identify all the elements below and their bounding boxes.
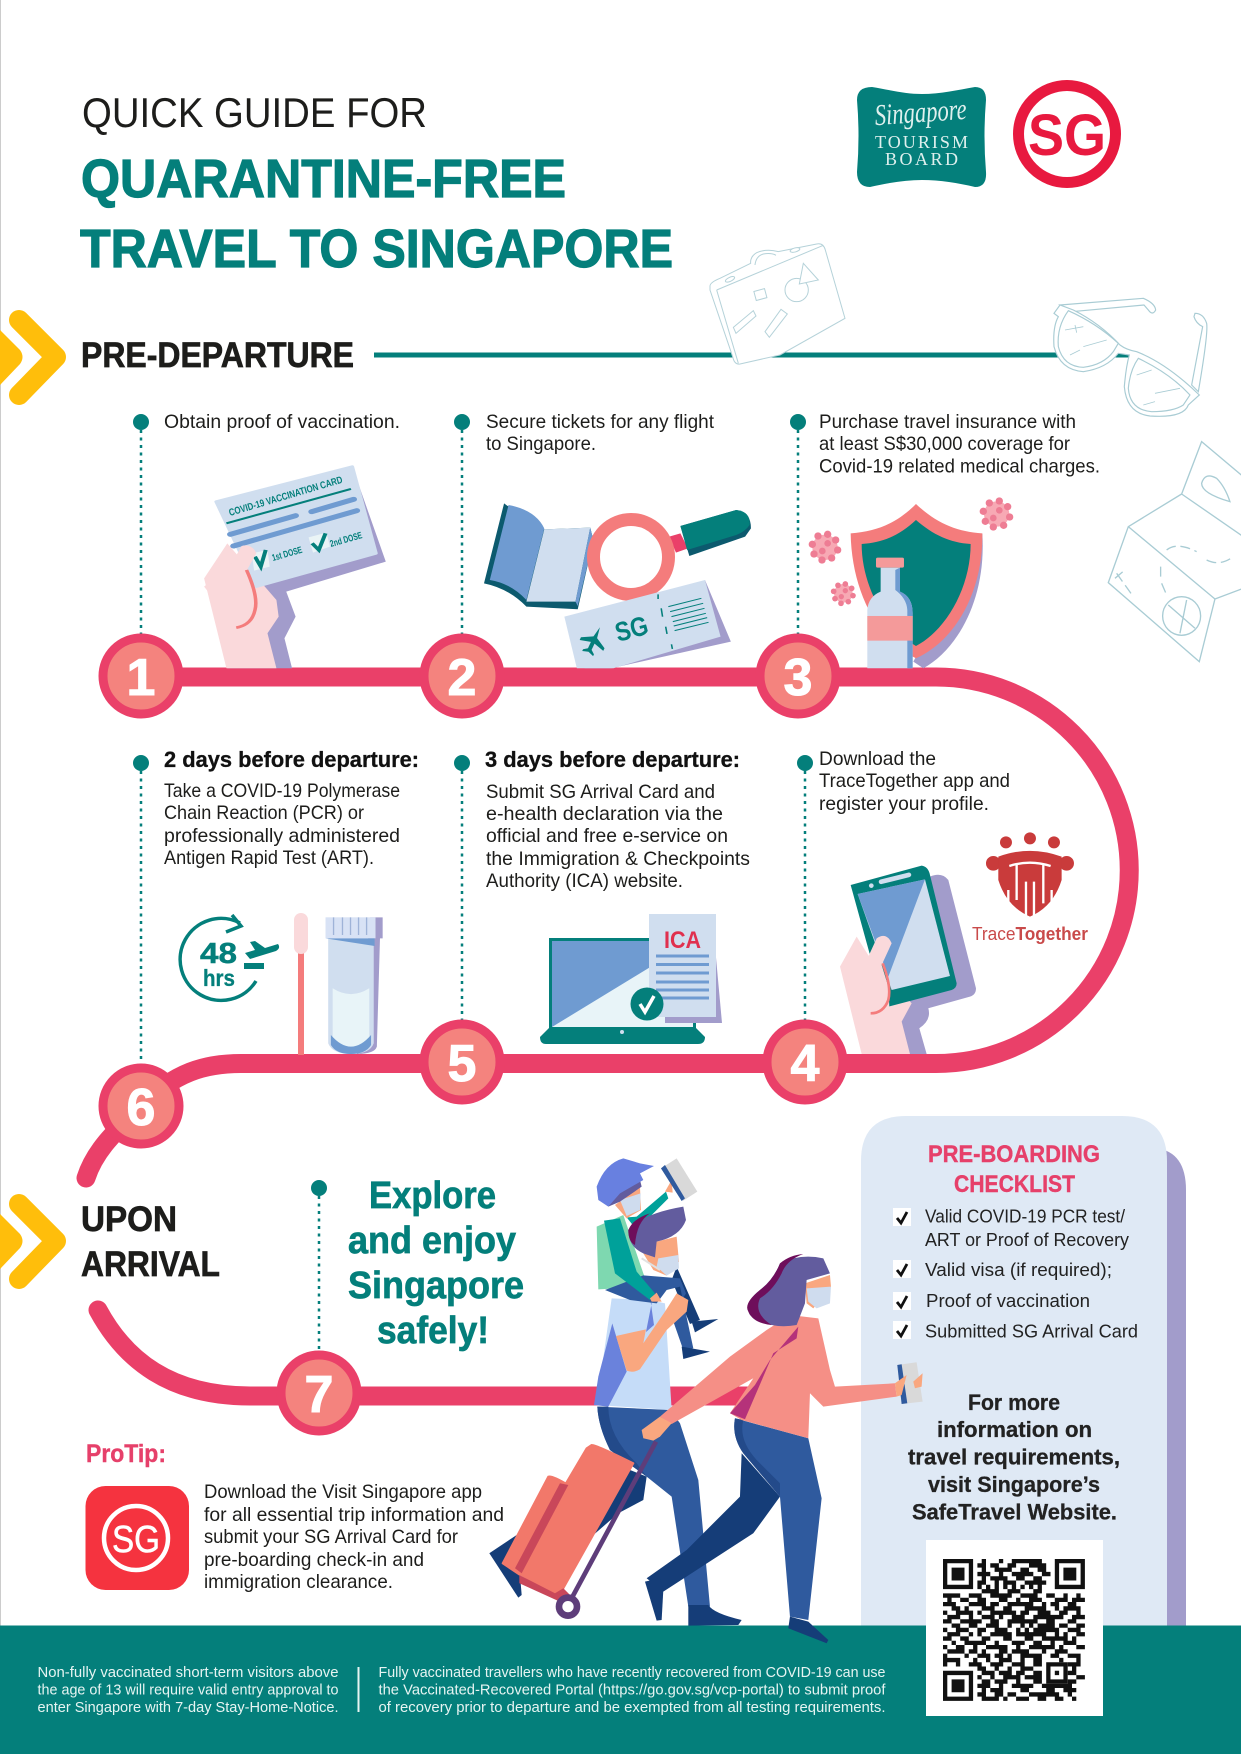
step 6 icon: 48 hours timer [180, 915, 279, 1000]
step 6 text: professionally administered [164, 825, 400, 847]
step 1 icon: vaccination card in hand: 2nd DOSE [329, 530, 364, 550]
step 5 text: the Immigration & Checkpoints [486, 848, 750, 870]
child upper body [597, 1158, 697, 1289]
step circle 7: 7 [305, 1366, 333, 1424]
step circle 2: 2 [448, 649, 476, 707]
woman [642, 1254, 923, 1643]
step 2 text: Secure tickets for any flight [486, 411, 715, 433]
panel: pre-boarding checklist: SafeTravel Website. [912, 1500, 1117, 1524]
step circle 6 [103, 1068, 179, 1144]
panel: pre-boarding checklist: travel requirements, [908, 1444, 1120, 1470]
panel: pre-boarding checklist: Valid visa (if required); [925, 1259, 1112, 1280]
panel: pre-boarding checklist: visit Singapore’s [928, 1472, 1100, 1497]
step 7 message: and enjoy [348, 1220, 516, 1262]
footer band: Fully vaccinated travellers who have recently recovered from COVID-19 can use [378, 1665, 886, 1681]
step 5 icon: laptop and ICA document [540, 914, 722, 1044]
icon: Visit Singapore app [86, 1486, 189, 1590]
protip text: Download the Visit Singapore app [204, 1481, 482, 1503]
step 5 icon: laptop and ICA document: ICA [664, 927, 701, 954]
step 2 text: to Singapore. [486, 433, 596, 455]
step 5 text: Submit SG Arrival Card and [486, 781, 715, 803]
step 5 text [454, 747, 750, 892]
logo: SG circle: SG [1028, 103, 1106, 168]
panel: pre-boarding checklist: CHECKLIST [954, 1171, 1075, 1198]
panel: pre-boarding checklist: For more [968, 1390, 1060, 1415]
step 3 icon: shield, bottle and viruses [809, 497, 1013, 668]
logo: SG circle [1018, 86, 1116, 182]
logo: TraceTogether [972, 832, 1088, 944]
step 7 message: safely! [377, 1310, 489, 1352]
chevrons: pre-departure [0, 320, 56, 395]
QR code [926, 1540, 1103, 1716]
title: QUARANTINE-FREE [81, 149, 566, 209]
logo: Singapore Tourism Board: Singapore [874, 93, 968, 132]
step 6 icon: 48 hours timer: hrs [203, 965, 235, 991]
man legs [489, 1407, 742, 1626]
heading: upon arrival: ARRIVAL [81, 1245, 220, 1284]
step circle 4: 4 [791, 1035, 820, 1093]
footer band: of recovery prior to departure and be exempted from all testing requirements. [378, 1700, 886, 1716]
step 3 text [790, 411, 1100, 478]
step circle 1: 1 [127, 649, 155, 707]
chevrons: upon arrival [0, 1204, 56, 1279]
step 6 icon: swab and test tube [294, 913, 383, 1055]
dotted connectors [141, 430, 805, 1354]
step 4 text: Download the [819, 748, 936, 770]
step 1 icon: vaccination card in hand [204, 467, 386, 668]
step 6 text [133, 747, 419, 869]
step 7 message [311, 1175, 524, 1352]
heading: pre-departure: PRE-DEPARTURE [81, 336, 354, 375]
title [80, 89, 673, 279]
step 2 text [454, 411, 715, 455]
step 4 text: TraceTogether app and [819, 770, 1010, 792]
step 6 text: 2 days before departure: [164, 747, 419, 772]
suitcase [503, 1442, 656, 1616]
step 6 text: Take a COVID-19 Polymerase [164, 780, 400, 802]
child far leg [672, 1267, 718, 1332]
logo: Singapore Tourism Board: TOURISM [875, 132, 968, 152]
panel: pre-boarding checklist: ART or Proof of Recovery [925, 1229, 1130, 1250]
pathway road upper [86, 677, 1129, 1178]
footer band: the age of 13 will require valid entry approval to [38, 1682, 338, 1698]
step circle 4 [767, 1024, 843, 1100]
sketch: folded map [1108, 442, 1241, 662]
footer band: Non-fully vaccinated short-term visitors above [38, 1665, 338, 1681]
sketch: suitcase [710, 244, 845, 364]
protip text: immigration clearance. [204, 1571, 393, 1593]
step 4 text [797, 748, 1010, 815]
protip heading: ProTip: [86, 1440, 166, 1468]
step 5 text: 3 days before departure: [485, 747, 740, 772]
illustration: travelling family [489, 1158, 923, 1643]
heading: pre-departure [81, 336, 1130, 375]
step 1 icon: vaccination card in hand: 1st DOSE [271, 545, 304, 564]
heading: upon arrival: UPON [81, 1200, 177, 1239]
step 7 message: Singapore [348, 1265, 524, 1307]
step 4 text: register your profile. [819, 793, 989, 815]
step 5 text: official and free e-service on [486, 825, 728, 847]
footer band [0, 1626, 1241, 1754]
step 5 text: e-health declaration via the [486, 803, 723, 825]
sketch: sunglasses [1054, 298, 1207, 416]
step circle 3 [760, 638, 836, 714]
step 5 text: Authority (ICA) website. [486, 870, 683, 892]
logo: Singapore Tourism Board [857, 87, 986, 187]
heading: upon arrival [81, 1200, 220, 1284]
logo: Singapore Tourism Board: BOARD [885, 149, 958, 169]
logo: TraceTogether: TraceTogether [972, 924, 1088, 944]
panel: pre-boarding checklist: Proof of vaccination [926, 1290, 1090, 1311]
step 2 icon: passport, magnifier and ticket [484, 503, 751, 668]
man torso [594, 1298, 672, 1410]
footer band: enter Singapore with 7-day Stay-Home-Notice. [38, 1700, 338, 1716]
child near leg and sleeve [604, 1218, 710, 1359]
panel: pre-boarding checklist: Valid COVID-19 PCR test/ [925, 1206, 1126, 1226]
step 6 text: Chain Reaction (PCR) or [164, 802, 364, 824]
step circle 3: 3 [784, 649, 812, 707]
panel: pre-boarding checklist: Submitted SG Arrival Card [925, 1320, 1138, 1342]
step circle 6: 6 [127, 1079, 155, 1137]
title: TRAVEL TO SINGAPORE [80, 219, 673, 279]
icon: Visit Singapore app: SG [112, 1519, 160, 1561]
panel: pre-boarding checklist: information on [937, 1417, 1092, 1442]
step 3 text: Covid-19 related medical charges. [819, 456, 1100, 478]
step circle 5: 5 [448, 1035, 476, 1093]
step 6 text: Antigen Rapid Test (ART). [164, 847, 374, 869]
step 4 icon: phone in hand [840, 866, 976, 1054]
protip text: for all essential trip information and [204, 1504, 504, 1526]
title: QUICK GUIDE FOR [82, 89, 427, 136]
panel: pre-boarding checklist: PRE-BOARDING [928, 1141, 1100, 1168]
step 6 icon: 48 hours timer: 48 [200, 938, 237, 970]
panel: pre-boarding checklist [861, 1116, 1186, 1640]
step 1 icon: vaccination card in hand: COVID-19 VACCINATION CARD [228, 475, 344, 519]
step circle 1 [103, 638, 179, 714]
protip text [204, 1481, 504, 1593]
step 7 message: Explore [369, 1175, 496, 1217]
step circle 5 [424, 1024, 500, 1100]
step 2 icon: passport, magnifier and ticket: SG [612, 610, 651, 648]
step 1 text: Obtain proof of vaccination. [164, 411, 400, 433]
protip text: pre-boarding check-in and [204, 1549, 424, 1571]
footer band: the Vaccinated-Recovered Portal (https://go.gov.sg/vcp-portal) to submit proof [378, 1682, 886, 1698]
man head [628, 1207, 686, 1276]
man arm [616, 1293, 688, 1372]
step 3 text: at least S$30,000 coverage for [819, 433, 1070, 455]
step circle 2 [424, 638, 500, 714]
step circle 7 [281, 1355, 357, 1431]
pathway road lower [98, 1310, 770, 1396]
step 3 text: Purchase travel insurance with [819, 411, 1076, 433]
protip text: submit your SG Arrival Card for [204, 1526, 458, 1548]
